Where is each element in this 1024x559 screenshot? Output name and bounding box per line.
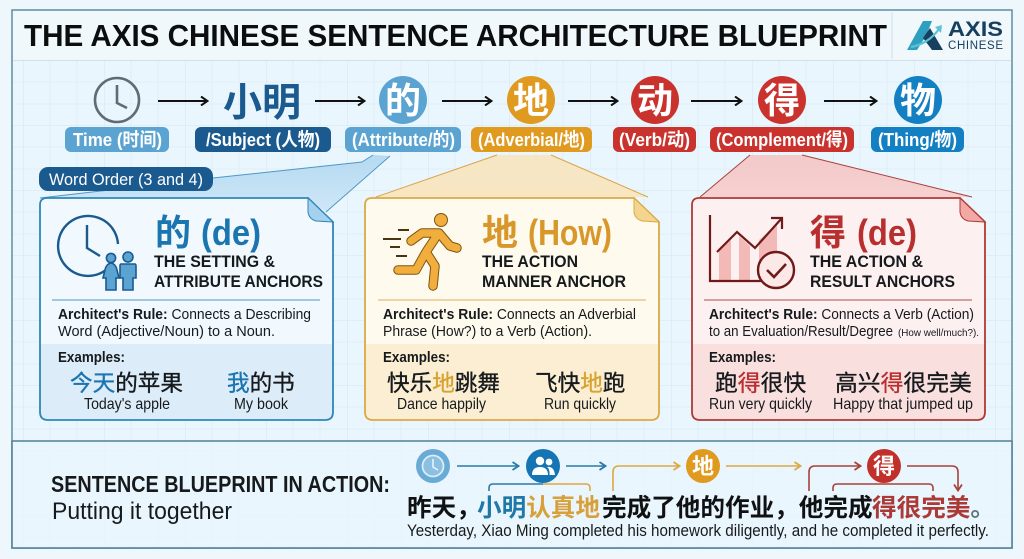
- flow icon: di: [686, 449, 720, 483]
- subheading: RESULT ANCHORS: [810, 272, 955, 291]
- verb circle: [631, 76, 679, 124]
- arrow 6: [824, 100, 876, 102]
- subheading: [810, 252, 955, 291]
- flow arrow: red down: [907, 466, 958, 490]
- logo: Axis Chinese: CHINESE: [948, 40, 1003, 52]
- thing circle: 物: [900, 80, 936, 121]
- example sentence: 昨天，: [407, 494, 481, 522]
- label: attribute: (Attribute/的): [352, 129, 455, 150]
- examples: Dance happily: [397, 396, 486, 413]
- label: adverbial: (Adverbial/地): [478, 129, 585, 150]
- flow icon: de: 得: [873, 454, 895, 479]
- adverbial circle: 地: [513, 80, 549, 121]
- example sentence: 。: [970, 495, 995, 522]
- heading: (How): [528, 212, 612, 253]
- panel: de result: [692, 198, 985, 420]
- logo: Axis Chinese: [907, 18, 1003, 52]
- examples: 我的书: [227, 371, 295, 396]
- example sentence: 得很完美: [872, 494, 971, 522]
- attribute circle: 的: [385, 80, 421, 121]
- arrow 4: [568, 100, 617, 102]
- examples: 飞快地跑: [535, 371, 625, 396]
- example sentence: 认真地: [526, 494, 600, 522]
- examples: Happy that jumped up: [833, 396, 973, 413]
- heading: 的: [155, 212, 191, 253]
- rule text: [58, 306, 311, 340]
- arrow 1: [158, 100, 207, 102]
- examples: [709, 349, 973, 413]
- adverbial circle: [507, 76, 555, 124]
- flow icon: clock: [416, 449, 450, 483]
- complement circle: [758, 76, 806, 124]
- examples: Examples:: [58, 349, 125, 366]
- bottom heading: [51, 471, 390, 525]
- flow arrow: [457, 465, 518, 467]
- bracket: subject to adverbial: [489, 484, 590, 491]
- examples: [58, 349, 295, 413]
- thing circle: [894, 76, 942, 124]
- subheading: [154, 252, 323, 291]
- rule text: to an Evaluation/Result/Degree: [709, 323, 893, 340]
- flow arrow: red: [809, 466, 860, 491]
- bottom heading: SENTENCE BLUEPRINT IN ACTION:: [51, 471, 390, 497]
- subheading: THE ACTION &: [810, 252, 923, 271]
- callout wedge: blue: [40, 155, 390, 212]
- examples: 今天的苹果: [70, 371, 183, 396]
- sentence translation: Yesterday, Xiao Ming completed his homework diligently, and he completed it perfectly.: [407, 522, 989, 540]
- example sentence: 完成了他的作业，他完成: [602, 494, 873, 522]
- heading: 地: [482, 212, 518, 253]
- flow arrow: amber: [726, 465, 800, 467]
- flow icon: people: [526, 449, 560, 483]
- examples: Examples:: [709, 349, 776, 366]
- rule text: [709, 306, 979, 340]
- attribute circle: [379, 76, 427, 124]
- heading: (de): [857, 212, 917, 253]
- word order tag: Word Order (3 and 4): [49, 171, 203, 189]
- subheading: THE SETTING &: [154, 252, 275, 271]
- rule text: (How well/much?).: [898, 328, 979, 339]
- rule text: Word (Adjective/Noun) to a Noun.: [58, 323, 275, 340]
- flow icon: de: [867, 449, 901, 483]
- heading: 得: [810, 212, 846, 253]
- title: THE AXIS CHINESE SENTENCE ARCHITECTURE BLUEPRINT: [24, 19, 887, 53]
- examples: Run very quickly: [709, 396, 812, 413]
- examples: Today's apple: [84, 396, 170, 413]
- panel: de attribute: [40, 198, 333, 420]
- logo: Axis Chinese: AXIS: [948, 18, 1003, 41]
- panel: sentence blueprint in action: [12, 441, 1012, 548]
- subheading: THE ACTION: [482, 252, 578, 271]
- example sentence: 小明: [477, 494, 526, 522]
- examples: 跑得很快: [715, 370, 806, 396]
- verb circle: 动: [637, 80, 673, 121]
- rule text: [383, 306, 636, 340]
- arrow 5: [691, 100, 741, 102]
- label: subject: /Subject (人物): [206, 129, 320, 150]
- callout wedge: amber: [376, 155, 648, 197]
- sequence labels: [65, 127, 964, 152]
- label: verb: (Verb/动): [619, 129, 690, 150]
- icon: runner: [383, 214, 457, 286]
- subject characters: 小明: [223, 82, 301, 125]
- examples: My book: [234, 396, 289, 413]
- label: thing: (Thing/物): [878, 129, 957, 150]
- bottom heading: Putting it together: [52, 498, 232, 525]
- examples: Run quickly: [544, 396, 616, 413]
- label: complement: (Complement/得): [716, 129, 848, 150]
- arrow 2: [315, 100, 364, 102]
- label: time: Time (时间): [73, 129, 162, 150]
- arrow 3: [442, 100, 491, 102]
- rule text: Phrase (How?) to a Verb (Action).: [383, 323, 592, 340]
- word order tag: [39, 167, 213, 191]
- examples: 高兴得很完美: [835, 370, 972, 396]
- flow arrow: amber: [613, 466, 679, 491]
- rule text: Architect's Rule: Connects a Verb (Action): [709, 306, 974, 323]
- rule text: Architect's Rule: Connects a Describing: [58, 306, 311, 323]
- flow arrow: [566, 465, 605, 467]
- subheading: ATTRIBUTE ANCHORS: [154, 272, 323, 291]
- icon: growth chart with check: [710, 215, 794, 288]
- rule text: Architect's Rule: Connects an Adverbial: [383, 306, 636, 323]
- examples: [383, 349, 625, 413]
- complement circle: 得: [764, 80, 800, 121]
- icon: clock with people: [58, 216, 136, 290]
- examples: Examples:: [383, 349, 450, 366]
- examples: 快乐地跳舞: [387, 371, 500, 396]
- icon: time clock: [95, 78, 139, 122]
- sequence row: [95, 76, 942, 125]
- callout wedge: red: [700, 155, 972, 197]
- subheading: MANNER ANCHOR: [482, 272, 626, 291]
- panel: di manner: [365, 198, 659, 420]
- heading: (de): [201, 212, 261, 253]
- subheading: [482, 252, 626, 291]
- bracket: red: [833, 484, 933, 491]
- flow icon: di: 地: [692, 454, 714, 479]
